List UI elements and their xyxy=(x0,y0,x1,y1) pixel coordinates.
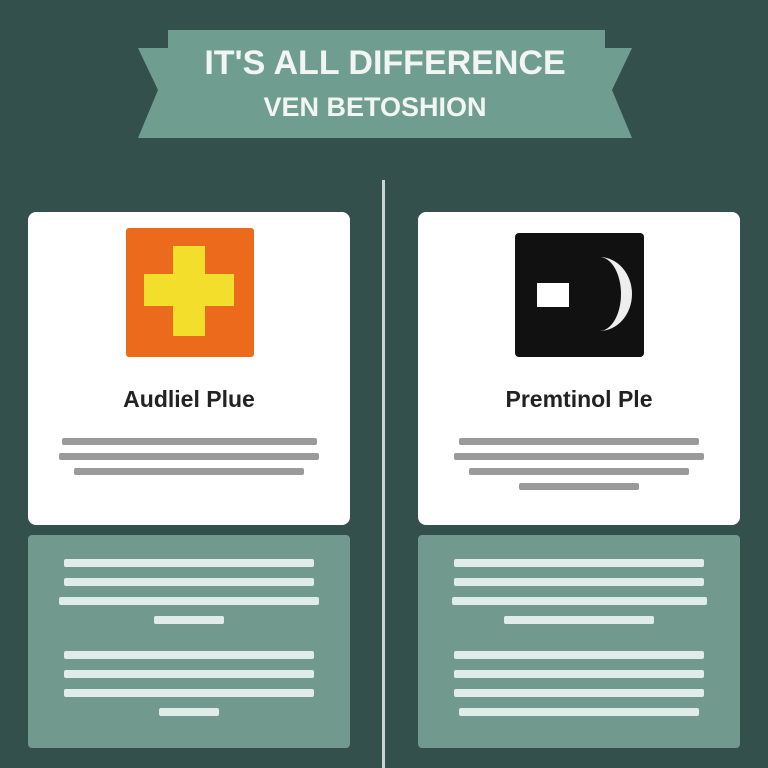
panel: left card xyxy=(28,212,350,525)
panel: right card xyxy=(418,212,740,525)
title banner xyxy=(138,30,632,138)
text block: left xyxy=(59,438,319,475)
icon: black moon xyxy=(515,233,644,357)
panel: left lower xyxy=(28,535,350,748)
icon: orange plus xyxy=(126,228,254,357)
title banner: VEN BETOSHION xyxy=(263,92,487,122)
panel: right lower xyxy=(418,535,740,748)
text block: right xyxy=(454,438,704,490)
divider line xyxy=(382,180,385,768)
heading: right: Premtinol Ple xyxy=(506,386,652,412)
title banner: IT'S ALL DIFFERENCE xyxy=(204,44,566,82)
heading: left: Audliel Plue xyxy=(123,386,255,412)
